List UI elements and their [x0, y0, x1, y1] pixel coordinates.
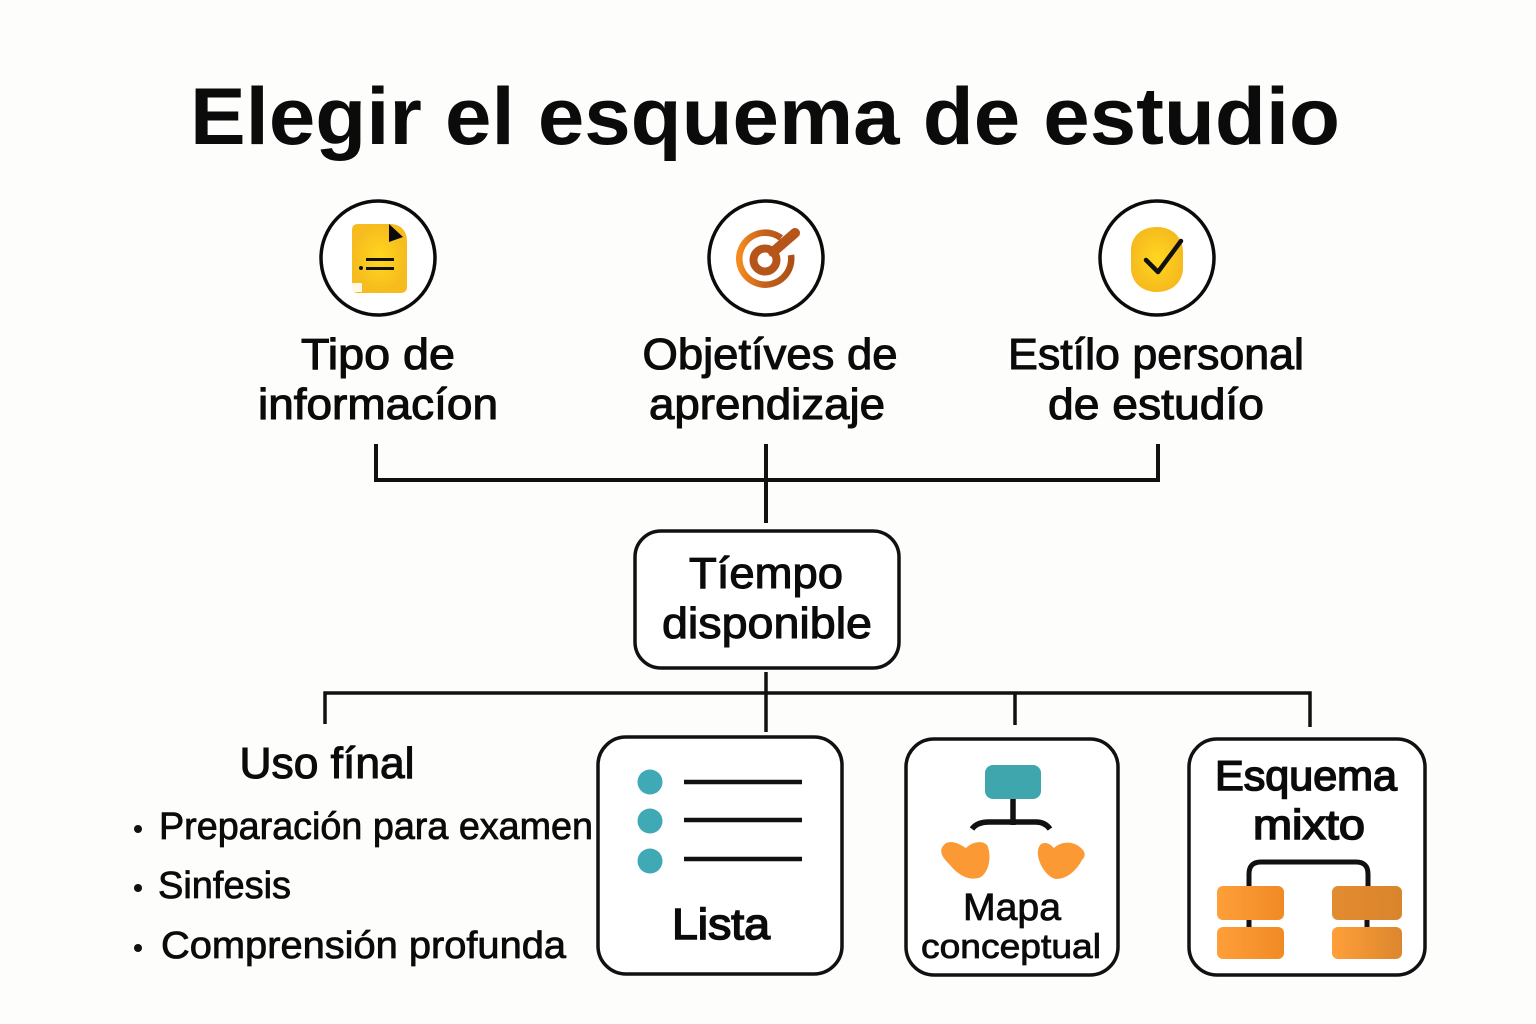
box: tiempo disponible	[635, 531, 899, 668]
connector: factors to time	[376, 444, 1158, 523]
icon: bullet list	[638, 770, 802, 874]
list: uso final: Preparación para examen	[159, 806, 593, 848]
label: mapa conceptual: Mapa	[963, 887, 1062, 929]
connector: time to outputs	[325, 672, 1310, 732]
label: tipo de información: Tipo de	[301, 330, 455, 379]
title: Elegir el esquema de estudio	[190, 72, 1340, 162]
card: esquema mixto	[1189, 739, 1425, 975]
list: uso final	[134, 806, 593, 967]
icon: document	[321, 201, 435, 315]
factor: objetivos de aprendizaje	[642, 201, 898, 429]
heading: uso final: Uso fínal	[240, 739, 414, 788]
label: tipo de información: informacíon	[258, 380, 498, 429]
label: esquema mixto: Esquema	[1215, 752, 1398, 799]
label: objetivos de aprendizaje: Objetíves de	[642, 330, 898, 379]
icon: target	[709, 201, 823, 315]
card: mapa conceptual	[906, 739, 1118, 975]
icon: concept map	[941, 765, 1085, 879]
box: tiempo disponible: Tíempo	[689, 549, 843, 598]
card: lista	[598, 737, 842, 974]
icon: mixed blocks	[1217, 862, 1402, 959]
label: objetivos de aprendizaje: aprendizaje	[649, 380, 885, 429]
factor: estilo personal	[1008, 201, 1304, 429]
panel: uso final	[134, 739, 593, 967]
label: estilo personal de estudio: Estílo personal	[1008, 330, 1304, 379]
icon: check badge	[1100, 201, 1214, 315]
list: uso final: Sinfesis	[158, 865, 291, 907]
label: estilo personal de estudio: de estudío	[1048, 380, 1264, 429]
label: lista: Lista	[672, 900, 771, 949]
list: uso final: Comprensión profunda	[161, 925, 567, 967]
label: mapa conceptual: conceptual	[921, 928, 1101, 966]
label: esquema mixto: mixto	[1253, 801, 1365, 848]
box: tiempo disponible: disponible	[662, 599, 872, 648]
factor: tipo de información	[258, 201, 498, 429]
